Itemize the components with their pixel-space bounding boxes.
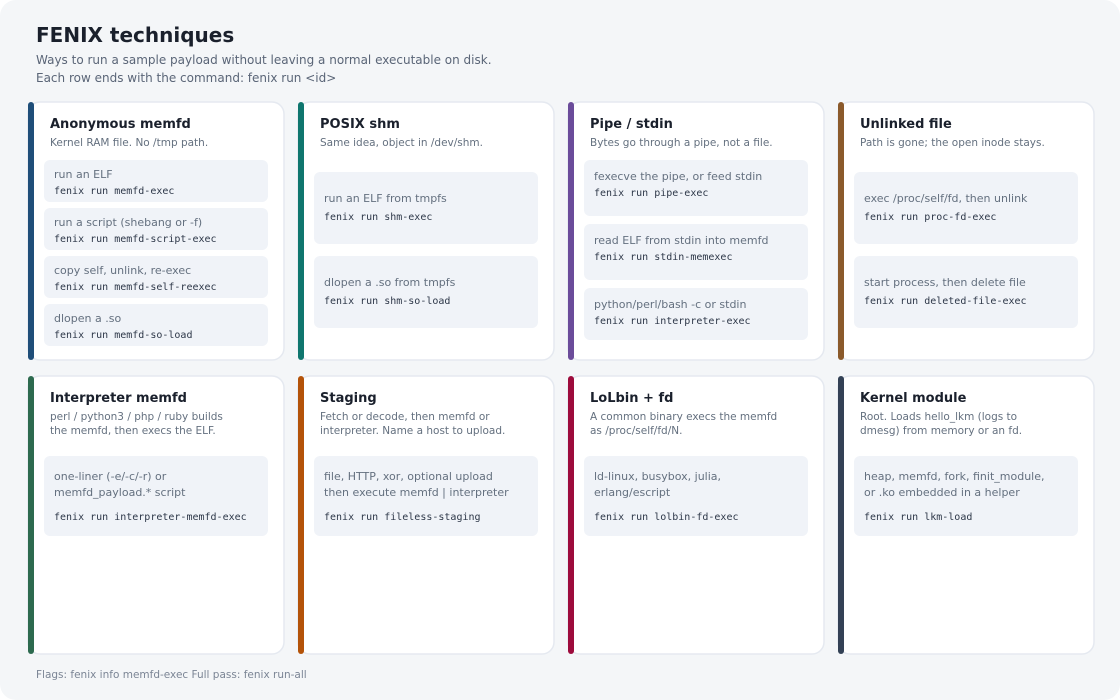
- panel: POSIX shm: run an ELF from tmpfs: [324, 192, 447, 205]
- panel: POSIX shm: POSIX shm: [320, 117, 400, 132]
- panel: Anonymous memfd: fenix run memfd-so-load: [54, 330, 192, 341]
- panel: Anonymous memfd: run an ELF: [54, 168, 113, 181]
- panel: Interpreter memfd: fenix run interpreter-memfd-exec: [54, 512, 247, 523]
- panel: Interpreter memfd: the memfd, then execs the ELF.: [50, 425, 216, 437]
- panel: Unlinked file: Unlinked file: [860, 117, 952, 132]
- panel: Unlinked file: start process, then delete file: [864, 276, 1026, 289]
- panel: Anonymous memfd: [28, 102, 284, 360]
- subtitle: Each row ends with the command: fenix run <id>: [36, 71, 336, 85]
- panel: Anonymous memfd: fenix run memfd-exec: [54, 186, 174, 197]
- panel: Pipe / stdin: python/perl/bash -c or stdin: [594, 298, 746, 311]
- panel: Pipe / stdin: read ELF from stdin into memfd: [594, 234, 768, 247]
- panel: Kernel module: Kernel module: [860, 391, 967, 406]
- panel: Pipe / stdin: [568, 102, 824, 360]
- panel: Anonymous memfd: Kernel RAM file. No /tmp path.: [50, 137, 208, 149]
- panel: LoLbin + fd: A common binary execs the memfd: [590, 411, 777, 423]
- panel: Interpreter memfd: Interpreter memfd: [50, 391, 187, 406]
- panel: Unlinked file: fenix run proc-fd-exec: [864, 212, 996, 223]
- panel: LoLbin + fd: LoLbin + fd: [590, 391, 673, 406]
- panel: POSIX shm: dlopen a .so from tmpfs: [324, 276, 456, 289]
- panel: POSIX shm: fenix run shm-exec: [324, 212, 432, 223]
- subtitle: [36, 53, 492, 85]
- panel: POSIX shm: [298, 102, 554, 360]
- panel: Anonymous memfd: dlopen a .so: [54, 312, 121, 325]
- panel: LoLbin + fd: erlang/escript: [594, 486, 671, 499]
- panel: LoLbin + fd: as /proc/self/fd/N.: [590, 425, 682, 437]
- panel: Staging: [298, 376, 554, 654]
- panel: Pipe / stdin: Pipe / stdin: [590, 117, 673, 132]
- panel: Unlinked file: fenix run deleted-file-exec: [864, 296, 1027, 307]
- panel: Kernel module: [838, 376, 1094, 654]
- panel: Interpreter memfd: memfd_payload.* script: [54, 486, 186, 499]
- panel: Pipe / stdin: fenix run interpreter-exec: [594, 316, 751, 327]
- panel: Anonymous memfd: copy self, unlink, re-exec: [54, 264, 191, 277]
- panel: Staging: fenix run fileless-staging: [324, 512, 481, 523]
- panel: Unlinked file: exec /proc/self/fd, then unlink: [864, 192, 1028, 205]
- panel: Interpreter memfd: one-liner (-e/-c/-r) or: [54, 470, 167, 483]
- panel: Kernel module: or .ko embedded in a helper: [864, 486, 1020, 499]
- panel: LoLbin + fd: fenix run lolbin-fd-exec: [594, 512, 738, 523]
- panel: Pipe / stdin: Bytes go through a pipe, not a file.: [590, 137, 773, 149]
- panel: Staging: interpreter. Name a host to upload.: [320, 425, 505, 437]
- panel: Anonymous memfd: Anonymous memfd: [50, 117, 191, 132]
- panel: Unlinked file: [838, 102, 1094, 360]
- panel: Staging: Fetch or decode, then memfd or: [320, 411, 490, 423]
- panel: Staging: file, HTTP, xor, optional upload: [324, 470, 493, 483]
- panel: Kernel module: fenix run lkm-load: [864, 512, 972, 523]
- panel: Interpreter memfd: [28, 376, 284, 654]
- panel: Interpreter memfd: perl / python3 / php / ruby builds: [50, 411, 223, 423]
- panel: Staging: Staging: [320, 391, 377, 406]
- panel: Anonymous memfd: run a script (shebang or -f): [54, 216, 202, 229]
- panel: POSIX shm: Same idea, object in /dev/shm.: [320, 137, 483, 149]
- panel: Staging: then execute memfd | interpreter: [324, 486, 509, 499]
- footer note: Flags: fenix info memfd-exec Full pass: fenix run-all: [36, 669, 307, 681]
- panel: Pipe / stdin: fenix run pipe-exec: [594, 188, 708, 199]
- panel: Pipe / stdin: fexecve the pipe, or feed stdin: [594, 170, 762, 183]
- panel: LoLbin + fd: [568, 376, 824, 654]
- title: FENIX techniques: [36, 23, 234, 47]
- panel: Pipe / stdin: fenix run stdin-memexec: [594, 252, 732, 263]
- panel: Kernel module: dmesg) from memory or an fd.: [860, 425, 1022, 437]
- panel: Kernel module: heap, memfd, fork, finit_module,: [864, 470, 1044, 483]
- panel: Kernel module: Root. Loads hello_lkm (logs to: [860, 411, 1017, 423]
- panel: Anonymous memfd: fenix run memfd-script-exec: [54, 234, 217, 245]
- subtitle: Ways to run a sample payload without leaving a normal executable on disk.: [36, 53, 492, 67]
- panel: Unlinked file: Path is gone; the open inode stays.: [860, 137, 1045, 149]
- panel: Anonymous memfd: fenix run memfd-self-reexec: [54, 282, 217, 293]
- panel: POSIX shm: fenix run shm-so-load: [324, 296, 450, 307]
- panel: LoLbin + fd: ld-linux, busybox, julia,: [594, 470, 721, 483]
